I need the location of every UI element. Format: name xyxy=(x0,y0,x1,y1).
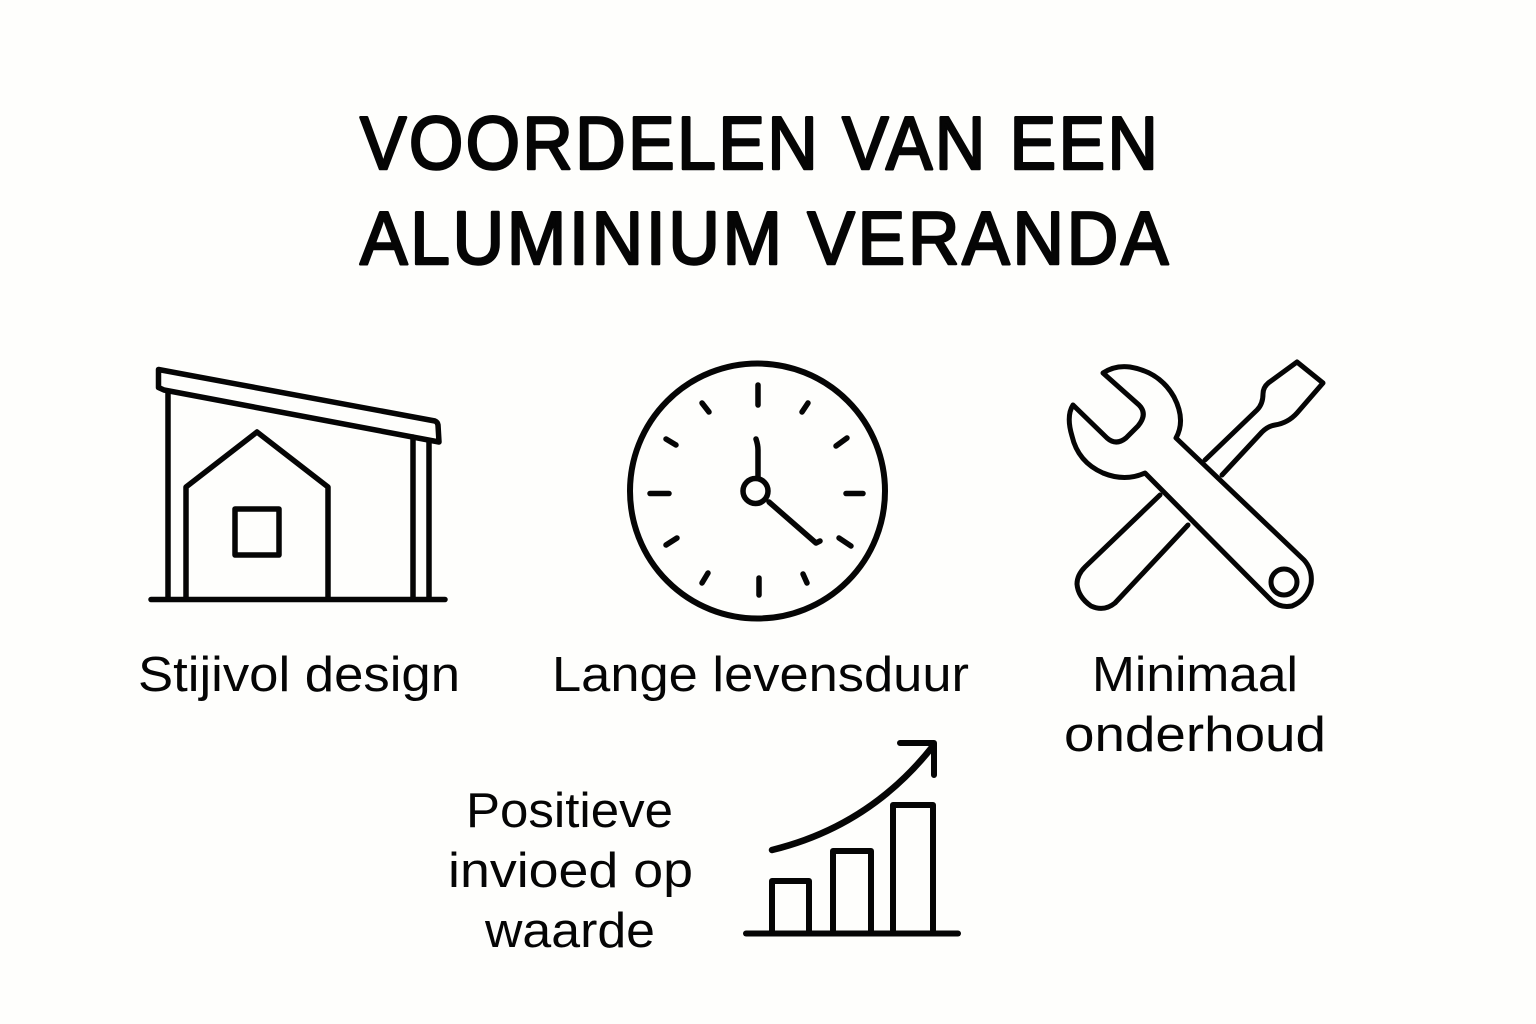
label: minimaal onderhoud: onderhoud xyxy=(1064,708,1326,762)
icon: crossed wrench and screwdriver xyxy=(1069,362,1323,608)
label: stijlvol design: Stijivol design xyxy=(138,648,460,702)
icon: veranda with house xyxy=(151,370,445,600)
title: VOORDELEN VAN EEN xyxy=(360,102,1158,186)
icon: clock xyxy=(630,364,885,618)
screwdriver handle xyxy=(1077,495,1188,608)
label: minimaal onderhoud: Minimaal xyxy=(1092,648,1298,702)
icon: rising bar chart with arrow xyxy=(746,743,958,934)
label: positieve invloed op waarde xyxy=(448,784,693,958)
screwdriver tip xyxy=(1205,362,1323,475)
title: ALUMINIUM VERANDA xyxy=(360,197,1169,280)
label: positieve invloed op waarde: invioed op xyxy=(448,844,693,898)
label: positieve invloed op waarde: waarde xyxy=(484,904,655,958)
label: lange levensduur: Lange levensduur xyxy=(552,648,969,702)
title xyxy=(360,102,1169,280)
label: minimaal onderhoud xyxy=(1064,648,1326,762)
wrench xyxy=(1069,367,1311,606)
label: positieve invloed op waarde: Positieve xyxy=(466,784,673,838)
wrench ring xyxy=(1271,569,1297,595)
